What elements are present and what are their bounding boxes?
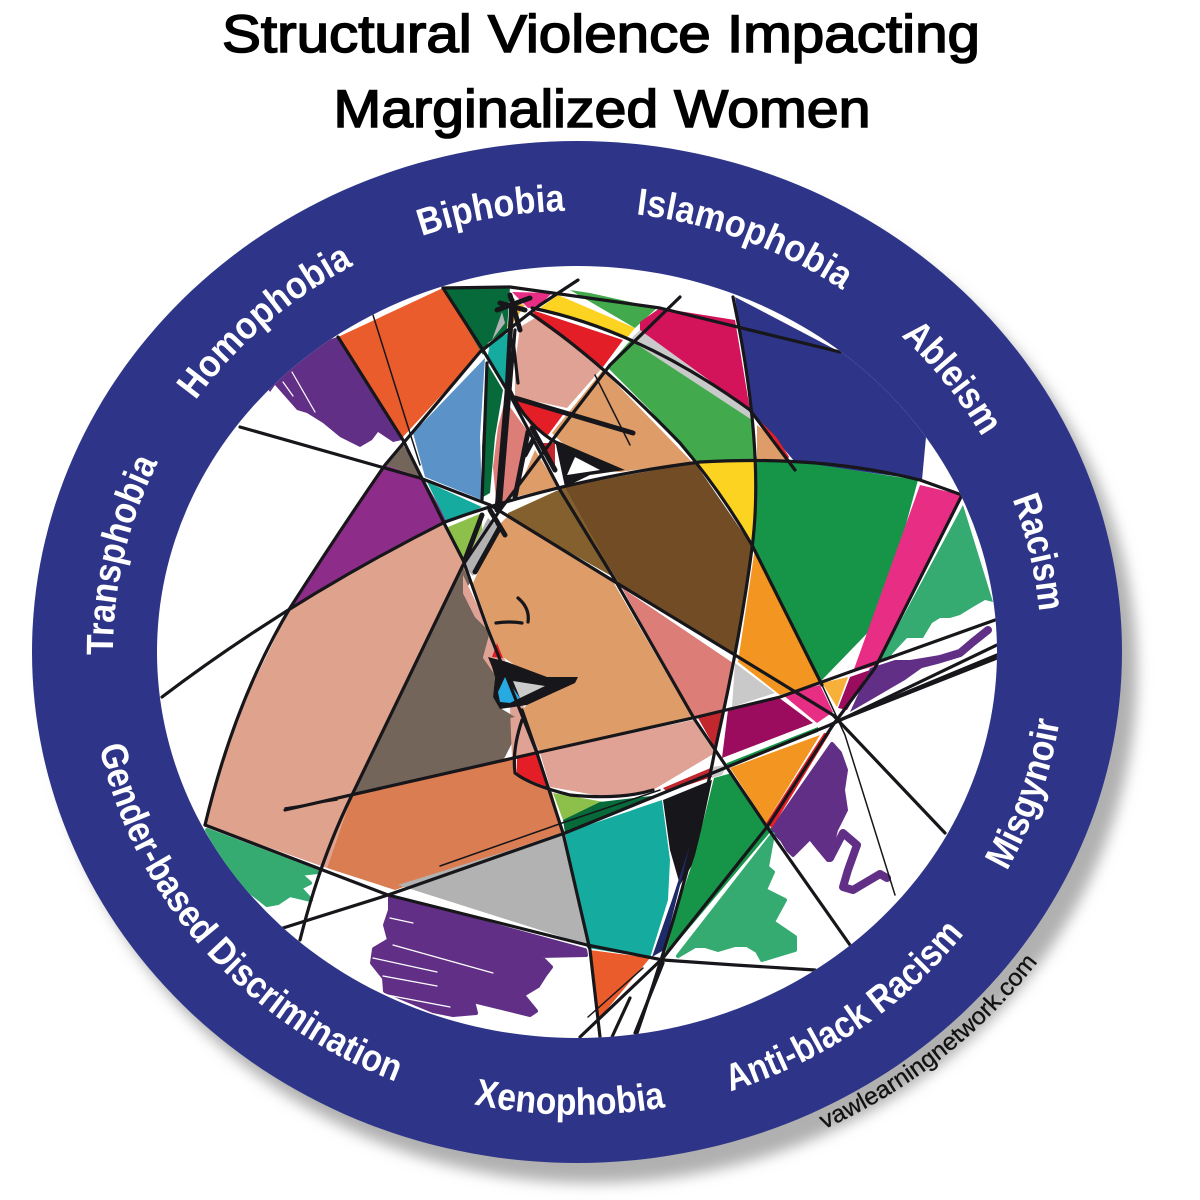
ring labels: Transphobia [86, 458, 158, 654]
icon: upper eye [555, 440, 625, 487]
drop shadow [47, 161, 1137, 1183]
ink lines [162, 280, 997, 1037]
ring labels: Ableism [902, 324, 997, 436]
panel: left colour field [205, 443, 563, 890]
ring labels: Gender-based Discrimination [102, 744, 400, 1081]
ring labels: Islamophobia [638, 188, 850, 290]
title: Marginalized Women [334, 80, 870, 139]
title [222, 5, 980, 139]
stained-glass face artwork [162, 280, 997, 1037]
panel: upper head [338, 287, 935, 510]
panel: profile in shadow [352, 567, 515, 795]
panel: centre head [463, 460, 962, 797]
icon: lower eye and lip [483, 643, 578, 720]
ring labels: Misgynoir [984, 718, 1058, 870]
website credit: vawlearningnetwork.com [818, 956, 1037, 1128]
ring labels: Racism [1013, 492, 1059, 610]
navy ring [32, 141, 1122, 1163]
ring labels: Homophobia [176, 250, 354, 399]
ring labels [86, 184, 1059, 1122]
title: Structural Violence Impacting [222, 5, 980, 64]
ring labels: Biphobia [416, 184, 566, 236]
panel: scribbled edges [207, 337, 993, 1020]
ring labels: Xenophobia [474, 1078, 666, 1122]
panel: lower shapes [398, 727, 830, 958]
ring labels: Anti-black Racism [730, 924, 963, 1092]
